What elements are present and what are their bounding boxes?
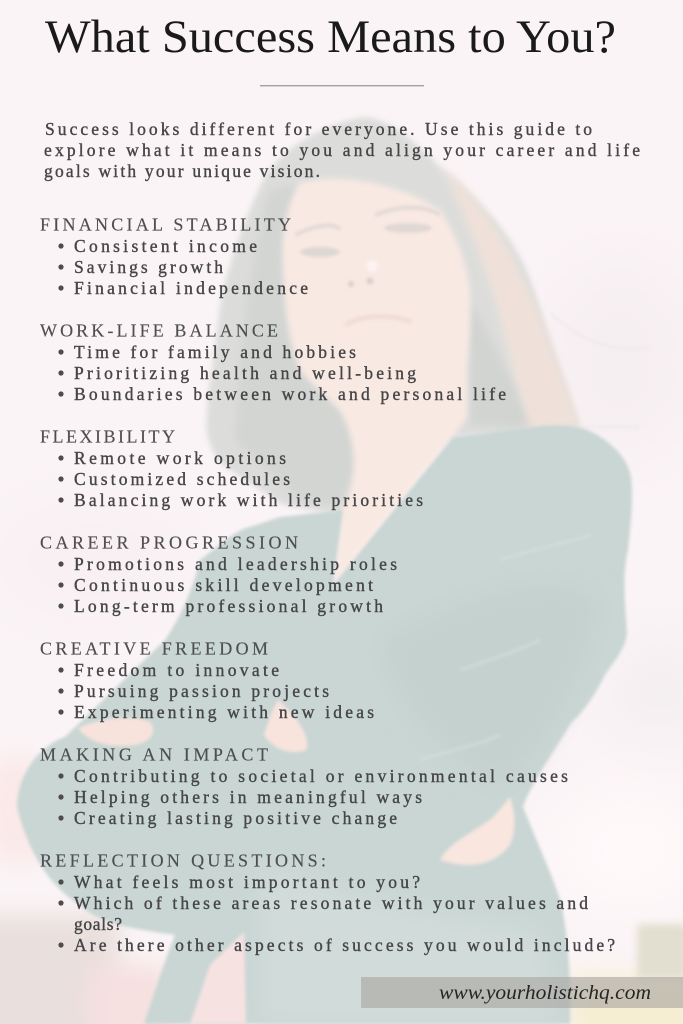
section: career progression: Continuous skill development bbox=[74, 575, 373, 595]
website banner bbox=[361, 977, 683, 1008]
section: flexibility bbox=[40, 426, 423, 510]
section: financial stability: FINANCIAL STABILITY bbox=[40, 214, 291, 234]
section: work-life balance: Prioritizing health and well-being bbox=[74, 363, 416, 383]
section: creative freedom: CREATIVE FREEDOM bbox=[40, 638, 268, 658]
section: financial stability: Consistent income bbox=[74, 236, 257, 256]
section: creative freedom: Experimenting with new ideas bbox=[74, 702, 374, 722]
section: work-life balance: Boundaries between work and personal life bbox=[74, 384, 506, 404]
section: flexibility: Balancing work with life priorities bbox=[74, 490, 423, 510]
jacket bbox=[17, 425, 632, 1024]
section: career progression: Promotions and leadership roles bbox=[74, 554, 397, 574]
section: making an impact: Creating lasting positive change bbox=[74, 808, 397, 828]
section: making an impact: MAKING AN IMPACT bbox=[40, 744, 268, 764]
flying hair strands bbox=[550, 313, 648, 428]
facial features bbox=[295, 208, 440, 325]
section: financial stability: Savings growth bbox=[74, 257, 223, 277]
face, neck and chest bbox=[283, 179, 470, 585]
section: financial stability bbox=[40, 214, 308, 298]
section: flexibility: Remote work options bbox=[74, 448, 286, 468]
section: work-life balance bbox=[40, 320, 506, 404]
section: reflection questions: Are there other aspects of success you would include? bbox=[74, 935, 615, 955]
warm hair streak bbox=[440, 165, 580, 430]
section: creative freedom: Freedom to innovate bbox=[74, 660, 279, 680]
section: reflection questions: goals? bbox=[74, 914, 122, 934]
divider bbox=[260, 85, 424, 86]
section: career progression: CAREER PROGRESSION bbox=[40, 532, 298, 552]
section: career progression: Long-term professional growth bbox=[74, 596, 383, 616]
section: making an impact: Helping others in meaningful ways bbox=[74, 787, 422, 807]
section: reflection questions: REFLECTION QUESTIONS: bbox=[40, 850, 326, 870]
section: making an impact: Contributing to societal or environmental causes bbox=[74, 766, 568, 786]
intro paragraph: explore what it means to you and align your career and life bbox=[44, 140, 640, 160]
section: flexibility: Customized schedules bbox=[74, 469, 290, 489]
section: career progression bbox=[40, 532, 397, 616]
intro paragraph bbox=[44, 119, 640, 181]
hands bbox=[78, 718, 153, 746]
section: creative freedom: Pursuing passion projects bbox=[74, 681, 329, 701]
section: flexibility: FLEXIBILITY bbox=[40, 426, 175, 446]
intro paragraph: Success looks different for everyone. Use this guide to bbox=[45, 119, 592, 139]
hair bbox=[207, 117, 580, 515]
section: financial stability: Financial independence bbox=[74, 278, 308, 298]
section: reflection questions: Which of these areas resonate with your values and bbox=[74, 893, 588, 913]
website banner: www.yourholistichq.com bbox=[439, 982, 651, 1004]
section: work-life balance: WORK-LIFE BALANCE bbox=[40, 320, 278, 340]
section: reflection questions bbox=[40, 850, 615, 955]
section: work-life balance: Time for family and hobbies bbox=[74, 342, 356, 362]
title: What Success Means to You? bbox=[45, 11, 616, 63]
section: making an impact bbox=[40, 744, 568, 828]
section: creative freedom bbox=[40, 638, 374, 722]
section: reflection questions: What feels most important to you? bbox=[74, 872, 420, 892]
intro paragraph: goals with your unique vision. bbox=[44, 161, 320, 181]
